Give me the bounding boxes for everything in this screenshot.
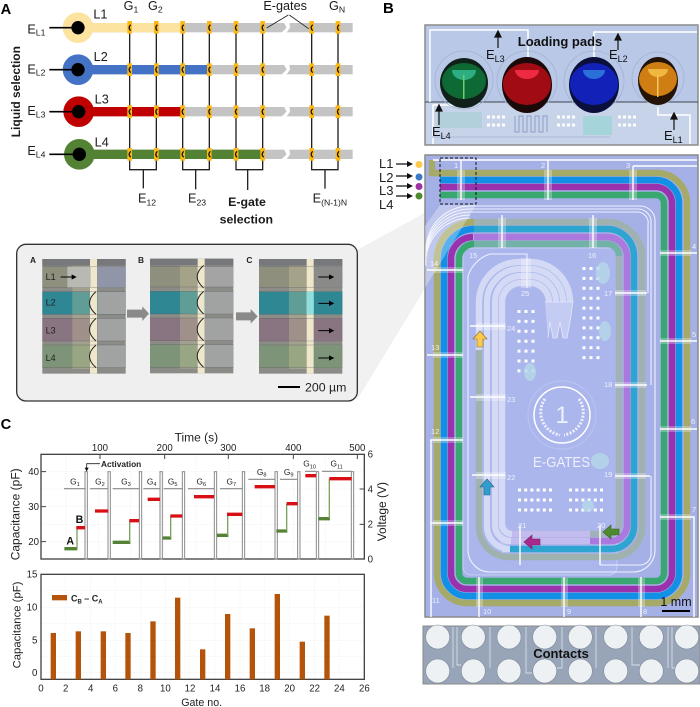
capacitance axis title: Capacitance (pF) [8, 468, 22, 560]
medal emblem [528, 381, 596, 449]
chart axis labels: 40 [28, 467, 39, 478]
E-GATES text: E-GATES [533, 454, 590, 471]
gate patches [433, 170, 691, 607]
gate labels: 3 [128, 482, 131, 488]
gate numbers: 20 [597, 521, 605, 530]
E-gate selection label: selection [220, 212, 273, 226]
green drop [440, 58, 488, 108]
chart axis labels: 400 [285, 443, 301, 454]
axis ticks [41, 454, 364, 542]
legend arrows [396, 164, 408, 196]
schematic labels: E [313, 192, 321, 206]
gate numbers: 25 [521, 289, 529, 298]
pads background [425, 25, 698, 145]
liquid L2 [49, 54, 209, 85]
electrode labels: E [432, 124, 441, 139]
contacts background [423, 626, 700, 684]
electrode arrows [436, 31, 677, 130]
liquid L4 [49, 139, 263, 170]
red drop [502, 57, 552, 113]
chart axis labels: 300 [220, 443, 236, 454]
gate labels: 9 [290, 473, 293, 479]
gate numbers: 4 [692, 242, 696, 251]
gate numbers: 2 [541, 161, 545, 170]
micrograph letters: A [30, 255, 36, 265]
legend: A [98, 600, 103, 606]
panel: microfluidic chip [425, 155, 698, 617]
axis numbers: 22 [309, 683, 320, 694]
medal emblem: 1 [555, 402, 569, 429]
axis numbers: 14 [210, 683, 221, 694]
electrode labels [432, 47, 683, 145]
micrograph A: L2 [46, 298, 56, 308]
liquid L3 [49, 96, 183, 127]
electrode labels: L1 [673, 135, 683, 145]
micrograph letters: C [246, 255, 252, 265]
panel B label: B [383, 0, 394, 17]
gate labels: 4 [153, 482, 156, 488]
panel C top chart [1, 417, 389, 565]
B-state traces [76, 476, 352, 528]
A-state traces [64, 479, 330, 549]
plot frame and grid [41, 574, 365, 679]
zoom wedge [357, 205, 476, 400]
gate numbers: 15 [469, 251, 477, 260]
schematic labels: E [27, 104, 36, 118]
schematic labels: E [27, 22, 36, 36]
gate numbers: 11 [432, 596, 440, 605]
serpentine electrodes [432, 112, 612, 137]
gate labels: 7 [233, 482, 236, 488]
lower dot arrays [518, 490, 606, 510]
axis numbers: 6 [113, 683, 118, 694]
schematic labels: E [188, 192, 196, 206]
blue arrow [480, 479, 494, 495]
axis numbers: 12 [185, 683, 195, 694]
legend labels [379, 156, 393, 212]
chart axis labels: 0 [368, 554, 373, 565]
gate labels: 10 [310, 464, 316, 470]
electrode labels: L2 [618, 54, 628, 64]
axis numbers: 10 [27, 603, 37, 614]
gray channels [83, 23, 353, 159]
gate numbers: 22 [507, 473, 515, 482]
chart axis labels: 500 [349, 443, 365, 454]
gate numbers: 10 [483, 607, 491, 616]
gate numbers: 14 [430, 259, 438, 268]
chip background [425, 155, 698, 617]
chart axis labels: 20 [28, 537, 39, 548]
schematic labels: L3 [95, 92, 109, 106]
contact pads [426, 625, 699, 683]
gate numbers: 6 [691, 417, 695, 426]
legend labels: L1 [379, 156, 393, 171]
legend arrowheads [407, 161, 413, 199]
schematic labels: 2 [158, 5, 163, 15]
outer gate electrodes [427, 160, 697, 617]
schematic labels: 1 [134, 5, 139, 15]
gate labels: G [147, 476, 153, 486]
gate numbers: 3 [626, 161, 630, 170]
iridescent bubbles [524, 262, 611, 512]
process arrow 2 [236, 309, 258, 324]
voltage axis title: Voltage (V) [375, 482, 389, 541]
legend: B [77, 600, 82, 606]
chart axis labels [28, 443, 374, 565]
purple arrow [524, 535, 540, 549]
chart axis labels: 4 [368, 484, 374, 495]
axis numbers: 8 [138, 683, 143, 694]
channel breaks [281, 22, 290, 160]
schematic labels: E [27, 62, 36, 76]
panel: micrograph inset [17, 244, 357, 401]
gate labels: G [303, 459, 310, 469]
activation marker [85, 459, 141, 472]
gate numbers: 8 [643, 607, 647, 616]
chart axis labels: 30 [28, 502, 39, 513]
gate labels: G [330, 459, 337, 469]
green inner top segment [474, 244, 619, 256]
gate numbers: 24 [507, 324, 515, 333]
purple inner channel [474, 237, 627, 541]
gate labels: 1 [77, 482, 80, 488]
white traces [430, 30, 697, 144]
axis numbers: 16 [235, 683, 245, 694]
legend: C [71, 594, 77, 604]
white dot arrays [519, 267, 598, 375]
legend labels: L4 [379, 197, 393, 212]
gate labels: G [284, 467, 290, 477]
inset background [17, 244, 357, 401]
axis numbers: 5 [32, 635, 37, 646]
axis numbers: 4 [88, 683, 94, 694]
gate labels: 11 [337, 464, 343, 470]
schematic labels: E [138, 192, 146, 206]
schematic labels: 23 [196, 197, 206, 207]
axis numbers [27, 569, 370, 694]
schematic labels: N [339, 5, 345, 15]
activation marker: Activation [101, 459, 141, 469]
funnel inlets [545, 302, 573, 338]
gate numbers: 17 [604, 289, 612, 298]
panel C label: C [1, 417, 12, 433]
gate labels: G [197, 476, 203, 486]
dashed zoom box [440, 158, 476, 204]
zoom wedge overlay [425, 205, 476, 288]
electrode labels: L4 [441, 131, 451, 141]
green inner channel [474, 244, 619, 534]
channel legend [379, 156, 422, 212]
gate numbers: 21 [518, 521, 526, 530]
panel A label: A [1, 2, 12, 18]
gate numbers: 13 [431, 343, 439, 352]
axis numbers: 26 [359, 683, 370, 694]
axis numbers: 20 [284, 683, 295, 694]
activation pulses [85, 472, 354, 559]
liquid L1 [49, 12, 183, 43]
state labels: B [76, 514, 84, 526]
schematic labels [27, 0, 347, 207]
schematic labels: L1 [93, 8, 107, 22]
electrode labels: E [609, 47, 618, 62]
schematic labels: 12 [146, 197, 156, 207]
gate numbers [430, 161, 696, 616]
axis numbers: 15 [27, 569, 37, 580]
gate labels: G [95, 476, 102, 486]
scale bar [278, 380, 346, 394]
axis numbers: 2 [63, 683, 68, 694]
loading pads label: Loading pads [518, 34, 602, 49]
gate labels: G [121, 476, 128, 486]
micrograph C [259, 259, 342, 374]
gate labels: G [168, 476, 174, 486]
axis numbers: 0 [38, 683, 44, 694]
axis numbers: 24 [334, 683, 345, 694]
panel: contacts [423, 625, 700, 684]
schematic labels: L2 [36, 68, 46, 78]
scale bar: 1 mm [660, 595, 692, 609]
schematic labels: L4 [95, 136, 109, 150]
axis numbers: 18 [259, 683, 270, 694]
axis numbers: 10 [160, 683, 171, 694]
schematic labels: L4 [36, 149, 46, 159]
E-gates [127, 21, 340, 161]
blue outer channel [440, 180, 679, 596]
micrograph A: L4 [46, 353, 56, 363]
inner bottom pale lanes [500, 534, 590, 541]
contacts label: Contacts [533, 646, 589, 661]
gate numbers: 9 [567, 607, 571, 616]
panel A: circuit schematic [1, 0, 353, 226]
micrograph B [150, 259, 233, 373]
plot frame and grid [41, 454, 365, 559]
electrode labels: E [486, 47, 495, 62]
gate labels: 2 [102, 482, 105, 488]
schematic labels: (N-1)N [321, 197, 347, 207]
scale bar: 200 µm [305, 380, 346, 394]
blue drop [569, 57, 619, 113]
schematic labels: E [27, 144, 36, 158]
gate numbers: 5 [692, 330, 696, 339]
panel C bottom bar chart [12, 569, 370, 707]
schematic labels: L1 [36, 28, 46, 38]
chart axis labels: 100 [92, 443, 108, 454]
schematic labels: L3 [36, 109, 46, 119]
gate numbers: 18 [604, 380, 612, 389]
micrograph letters: B [138, 255, 144, 265]
white dot arrays [487, 117, 638, 125]
chart axis labels: 200 [157, 443, 173, 454]
micrograph A [42, 259, 126, 374]
electrode labels: E [664, 128, 673, 143]
gate numbers: 12 [431, 427, 439, 436]
micrograph A: L1 [46, 272, 56, 282]
gate labels [70, 459, 343, 488]
chart axis labels: 2 [368, 520, 373, 531]
center lanes highlight [479, 262, 570, 549]
gate numbers: 16 [588, 251, 596, 260]
gate labels: G [70, 476, 77, 486]
white wiring outlines [426, 206, 655, 572]
gate numbers: 23 [507, 395, 515, 404]
electrode labels: L3 [495, 54, 505, 64]
E-gate selection label: E-gate [228, 195, 266, 209]
yellow arrow [473, 331, 487, 347]
gate labels: 6 [203, 482, 206, 488]
electrode lines and brackets [130, 28, 338, 190]
gate numbers: 1 [454, 161, 458, 170]
amber drop [638, 57, 678, 105]
E-gates pointer lines [267, 15, 309, 29]
gate labels: 8 [263, 473, 266, 479]
legend dots [416, 161, 422, 200]
micrograph letters [30, 255, 252, 265]
gate labels: G [257, 467, 263, 477]
capacitance axis title: Capacitance (pF) [12, 581, 24, 668]
liquid selection label: Liquid selection [9, 46, 23, 137]
process arrow 1 [127, 306, 149, 321]
purple outer channel [440, 187, 672, 589]
gate labels: 5 [174, 482, 177, 488]
gate numbers: 19 [604, 470, 612, 479]
contact traces [453, 627, 675, 673]
micrograph A: L3 [46, 326, 56, 336]
legend labels: L2 [379, 170, 393, 185]
state labels [66, 514, 84, 547]
olive inner channel [474, 222, 642, 557]
time axis title: Time (s) [175, 430, 218, 444]
chart axis labels: 6 [368, 449, 373, 460]
olive outer channel [432, 160, 687, 603]
schematic labels: L2 [94, 50, 108, 64]
center die [463, 248, 617, 575]
blue inner channel [474, 229, 634, 549]
gate label lines [64, 471, 352, 489]
bars [51, 594, 330, 679]
green arrow [603, 525, 619, 539]
gate numbers: 7 [692, 505, 696, 514]
green outer channel [440, 195, 664, 581]
faint pad rings [435, 51, 684, 111]
panel: loading pads [425, 25, 698, 145]
gate labels: G [227, 476, 233, 486]
legend [52, 594, 103, 606]
axis numbers: 0 [32, 668, 37, 679]
legend: – C [82, 594, 99, 604]
legend labels: L3 [379, 183, 393, 198]
state labels: A [66, 535, 74, 547]
